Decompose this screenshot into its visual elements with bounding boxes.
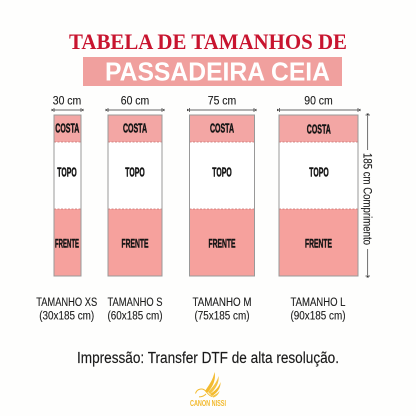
garment M: COSTA <box>210 122 234 136</box>
label XS <box>36 297 97 322</box>
width dimension XS: 30 cm <box>53 96 81 108</box>
label XS: TAMANHO XS <box>36 297 97 309</box>
garment S: COSTA <box>123 122 147 136</box>
length dimension arrow: 185 cm Comprimento <box>360 153 372 245</box>
garment L: TOPO <box>309 166 329 180</box>
garment XS: TOPO <box>57 166 77 180</box>
garment S <box>108 115 162 276</box>
label L <box>290 297 346 322</box>
length dimension arrow <box>360 115 372 276</box>
width dimension S <box>108 96 162 112</box>
title: TABELA DE TAMANHOS DE <box>69 29 347 54</box>
label S: (60x185 cm) <box>108 310 163 322</box>
garment S: TOPO <box>125 166 145 180</box>
garment XS: COSTA <box>55 122 79 136</box>
width dimension L: 90 cm <box>304 96 333 108</box>
panel: size XS <box>36 96 97 322</box>
garment L: FRENTE <box>305 236 332 250</box>
label M <box>192 297 252 322</box>
label M: TAMANHO M <box>192 297 252 309</box>
label L: TAMANHO L <box>290 297 346 309</box>
width dimension M <box>190 96 254 112</box>
garment M: TOPO <box>212 166 232 180</box>
label L: (90x185 cm) <box>290 310 346 322</box>
label XS: (30x185 cm) <box>39 310 94 322</box>
panel: size S <box>108 96 163 322</box>
subtitle banner: PASSADEIRA CEIA <box>105 56 330 86</box>
garment M: FRENTE <box>208 236 236 250</box>
label S <box>108 297 163 322</box>
garment S: FRENTE <box>122 236 148 250</box>
panel: size M <box>190 96 254 322</box>
icon: golden bird <box>196 372 221 398</box>
logo: Canon Nissi <box>190 372 226 408</box>
brand name: CANON NISSI <box>190 398 226 408</box>
label M: (75x185 cm) <box>194 310 250 322</box>
width dimension S: 60 cm <box>121 96 149 108</box>
garment M <box>190 115 254 276</box>
width dimension XS <box>53 96 81 112</box>
width dimension L <box>280 96 358 112</box>
label S: TAMANHO S <box>108 297 163 309</box>
garment XS: FRENTE <box>55 236 79 250</box>
panel: size L <box>279 96 358 322</box>
garment L <box>279 115 358 276</box>
width dimension M: 75 cm <box>208 96 236 108</box>
garment XS <box>54 115 81 276</box>
garment L: COSTA <box>307 122 331 136</box>
print note: Impressão: Transfer DTF de alta resolução. <box>77 350 339 367</box>
